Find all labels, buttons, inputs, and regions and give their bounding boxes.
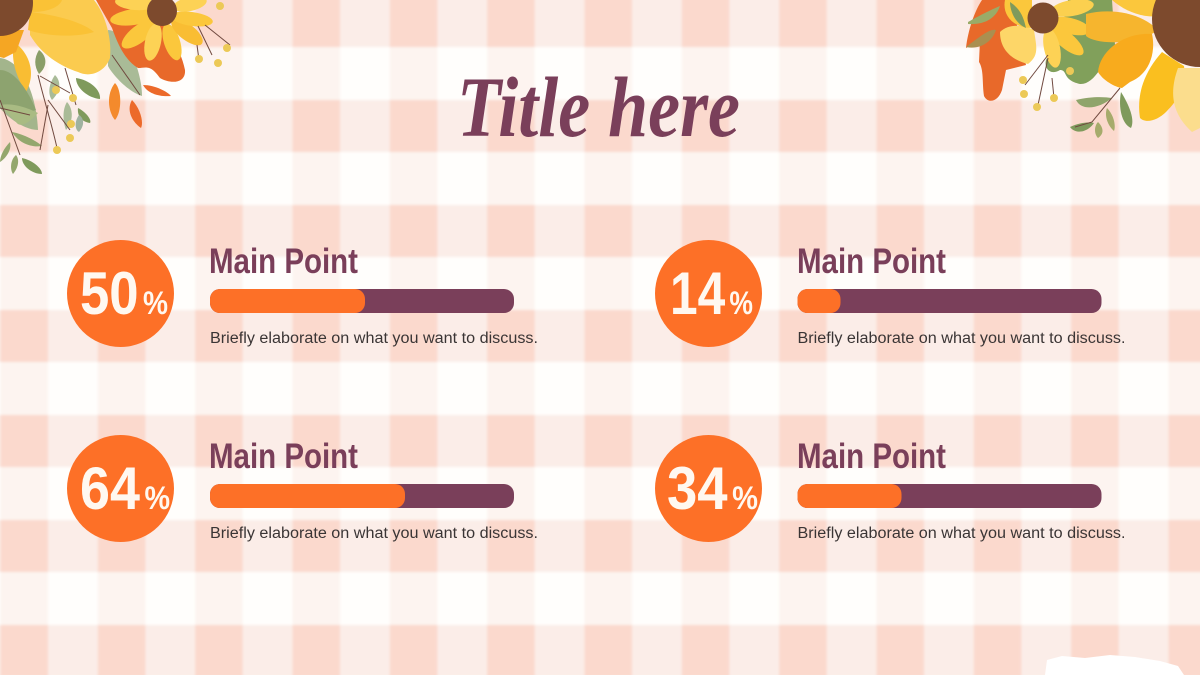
heading: main point: Main Point [209, 437, 358, 476]
heading: main point: Main Point [797, 242, 946, 281]
badge: 34% [655, 435, 762, 542]
item: 64% main point [67, 435, 538, 542]
leaf: green cluster [1046, 0, 1115, 84]
leaf: large yellow [30, 0, 110, 74]
description: Briefly elaborate on what you want to discuss. [210, 330, 538, 347]
progress bar: 50 percent [210, 289, 514, 313]
badge: 14%: 14% [670, 260, 753, 327]
item: 50% main point [67, 240, 538, 347]
leaves and sprigs [966, 2, 1132, 138]
item: 34% main point [655, 435, 1126, 542]
progress bar: 14 percent [798, 289, 1102, 313]
badge: 50% [67, 240, 174, 347]
torn white paper scrap, bottom right [1045, 655, 1184, 675]
item: 14% main point [655, 240, 1126, 347]
leaves and sprigs [0, 2, 231, 174]
heading: main point: Main Point [209, 242, 358, 281]
leaf: sage green, left [0, 58, 38, 130]
description: Briefly elaborate on what you want to discuss. [798, 330, 1126, 347]
progress bar: 64 percent [210, 484, 514, 508]
floral corner: top right [966, 0, 1200, 138]
leaf: orange maple [966, 0, 1026, 101]
leaf: orange maple [96, 0, 185, 82]
flower: large sunflower [1086, 0, 1200, 132]
heading: main point: Main Point [797, 437, 946, 476]
badge: 34%: 34% [667, 455, 758, 522]
flower: large sunflower, cut by corner [0, 0, 94, 92]
flower: small sunflower [109, 0, 214, 63]
title: Title here [457, 59, 740, 155]
flower: small sunflower [1000, 0, 1095, 69]
badge: 64%: 64% [80, 455, 170, 522]
badge: 50%: 50% [80, 260, 168, 327]
progress bar: 34 percent [798, 484, 1102, 508]
description: Briefly elaborate on what you want to discuss. [210, 525, 538, 542]
badge: 64% [67, 435, 174, 542]
description: Briefly elaborate on what you want to discuss. [798, 525, 1126, 542]
badge: 14% [655, 240, 762, 347]
floral corner: top left [0, 0, 231, 174]
leaf: sage green, centre [108, 30, 142, 96]
